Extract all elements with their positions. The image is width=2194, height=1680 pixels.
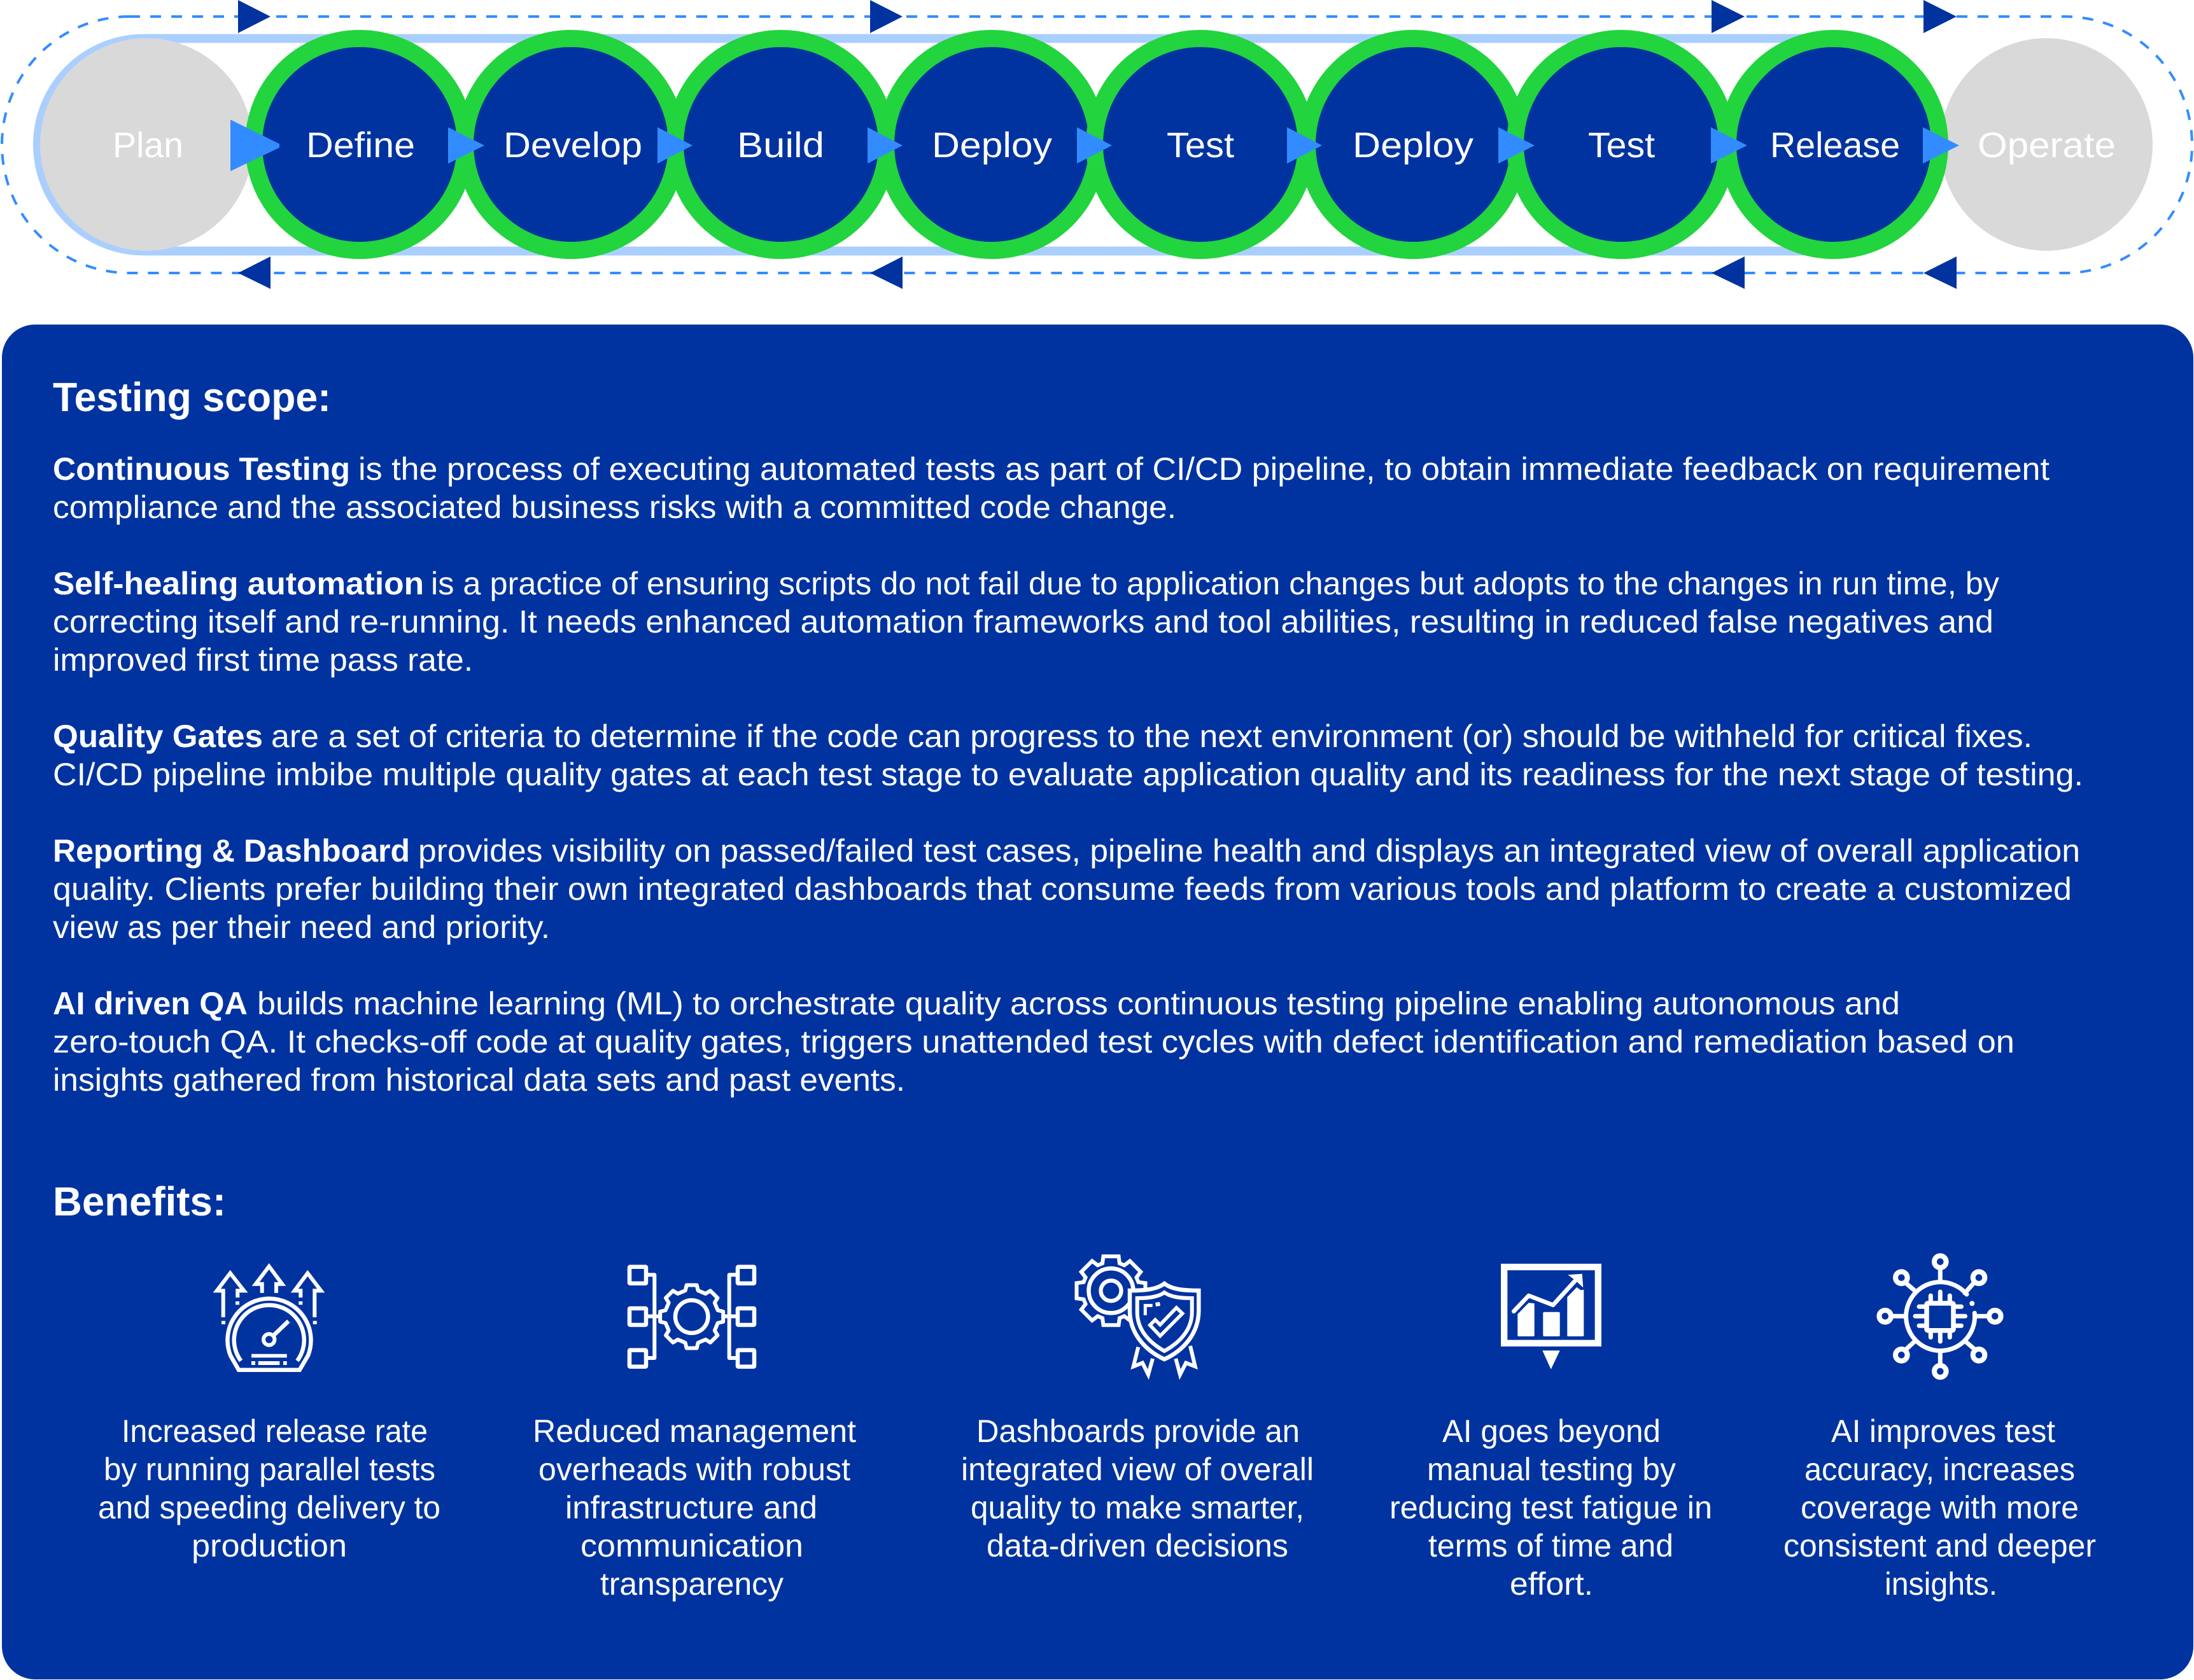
text block: benefit 5: insights. xyxy=(1885,1566,1997,1602)
text block: benefit 4: AI goes beyond xyxy=(1442,1413,1661,1449)
text block: AI driven QA: AI driven QA xyxy=(53,986,248,1021)
text block: benefit 3 xyxy=(961,1413,1314,1564)
stage: Build: Build xyxy=(737,125,824,165)
stage: Plan xyxy=(40,38,253,251)
stage: Deploy xyxy=(886,38,1097,251)
stage: Test second: Test xyxy=(1588,125,1655,165)
stage: Test: Test xyxy=(1167,125,1234,165)
text block: AI driven QA xyxy=(53,986,2015,1098)
text block: Quality Gates xyxy=(53,718,2083,792)
text block: Continuous Testing xyxy=(53,451,2050,525)
text block: benefit 4: effort. xyxy=(1510,1566,1593,1602)
stage: Test second xyxy=(1515,38,1727,251)
arrows: bottom loop direction xyxy=(238,256,1957,289)
text block: AI driven QA: insights gathered from historical data sets and past events. xyxy=(53,1062,905,1098)
text block: benefit 5: accuracy, increases xyxy=(1804,1452,2075,1487)
stage: Release: Release xyxy=(1770,125,1900,165)
text block: AI driven QA: builds machine learning (ML) to orchestrate quality across continuous testing pipeline enabling autonomous and xyxy=(257,986,1900,1021)
dashed feedback loop xyxy=(2,17,2192,273)
text block: Continuous Testing: is the process of executing automated tests as part of CI/CD pipeline, to obtain immediate feedback on requirement xyxy=(358,451,2050,487)
text block: Self-healing automation: correcting itself and re-running. It needs enhanced automation frameworks and tool abilities, resulting in reduced false negatives and xyxy=(53,604,1994,640)
text block: benefit 2 xyxy=(533,1413,856,1602)
text block: Quality Gates: CI/CD pipeline imbibe multiple quality gates at each test stage to evaluate application quality and its readiness for the next stage of testing. xyxy=(53,757,2083,792)
stage: Operate: Operate xyxy=(1978,125,2116,165)
text block: benefit 2: infrastructure and xyxy=(565,1490,817,1525)
text block: benefit 3: integrated view of overall xyxy=(961,1452,1314,1487)
stage: Release xyxy=(1727,38,1940,251)
stage: Build xyxy=(675,38,887,251)
text block: Reporting and Dashboard: quality. Clients prefer building their own integrated dashboards that consume feeds from various tools and platform to create a customized xyxy=(53,871,2072,907)
stage: Operate xyxy=(1940,38,2153,251)
stage: Deploy second: Deploy xyxy=(1353,125,1473,165)
text block: benefit 2: Reduced management xyxy=(533,1413,856,1449)
text block: Quality Gates: are a set of criteria to determine if the code can progress to the next environment (or) should be withheld for critical fixes. xyxy=(271,718,2032,754)
text block: benefit 1: and speeding delivery to xyxy=(98,1490,440,1525)
text block: AI driven QA: zero-touch QA. It checks-off code at quality gates, triggers unattended test cycles with defect identification and remediation based on xyxy=(53,1024,2015,1060)
text block: Self-healing automation: Self-healing automation xyxy=(53,566,424,601)
pipeline diagram xyxy=(2,0,2192,289)
text block: benefit 1: production xyxy=(192,1528,347,1564)
text block: Self-healing automation xyxy=(53,566,1999,678)
icon: gear and shield xyxy=(1077,1256,1199,1375)
stage: Develop xyxy=(465,38,677,251)
icon: gear network xyxy=(629,1267,754,1367)
text block: Reporting and Dashboard: view as per their need and priority. xyxy=(53,909,550,945)
stage: Deploy second xyxy=(1307,38,1519,251)
arrows: stage connectors xyxy=(230,120,1959,171)
icon: chart board xyxy=(1504,1267,1598,1369)
stage: Deploy: Deploy xyxy=(932,125,1052,165)
light blue track xyxy=(38,38,1833,251)
stage: Test xyxy=(1095,38,1306,251)
heading: Benefits: Benefits: xyxy=(53,1179,226,1224)
text block: Reporting and Dashboard xyxy=(53,833,2080,945)
text block: Self-healing automation: improved first time pass rate. xyxy=(53,642,473,678)
arrows: top loop direction xyxy=(238,0,1957,33)
text block: benefit 2: overheads with robust xyxy=(538,1452,850,1487)
text block: Quality Gates: Quality Gates xyxy=(53,718,263,754)
text block: benefit 1 xyxy=(98,1413,440,1564)
text block: benefit 4: manual testing by xyxy=(1427,1452,1676,1487)
text block: Continuous Testing: Continuous Testing xyxy=(53,451,350,487)
icon: speedometer with arrows xyxy=(217,1266,321,1370)
text block: Reporting and Dashboard: Reporting & Dashboard xyxy=(53,833,410,869)
text block: Continuous Testing: compliance and the associated business risks with a committed code change. xyxy=(53,489,1176,525)
stage: Develop: Develop xyxy=(503,125,642,165)
text block: benefit 3: Dashboards provide an xyxy=(976,1413,1300,1449)
text block: Self-healing automation: is a practice of ensuring scripts do not fail due to application changes but adopts to the changes in run time, by xyxy=(431,566,1999,601)
text block: benefit 2: communication xyxy=(580,1528,803,1564)
text block: Reporting and Dashboard: provides visibility on passed/failed test cases, pipeline health and displays an integrated view of overall application xyxy=(418,833,2080,869)
text block: benefit 4 xyxy=(1389,1413,1712,1602)
stage: Plan: Plan xyxy=(113,125,183,165)
stage: Define: Define xyxy=(306,125,415,165)
text block: benefit 5: consistent and deeper xyxy=(1783,1528,2096,1564)
text block: benefit 3: quality to make smarter, xyxy=(971,1490,1304,1525)
text block: benefit 4: terms of time and xyxy=(1428,1528,1673,1564)
icon: AI chip xyxy=(1879,1256,2001,1377)
text block: benefit 1: Increased release rate xyxy=(122,1413,428,1449)
text block: benefit 5: AI improves test xyxy=(1831,1413,2055,1449)
heading: Testing scope: Testing scope: xyxy=(53,374,331,420)
stage: Define xyxy=(253,38,466,251)
text block: benefit 1: by running parallel tests xyxy=(104,1452,435,1487)
text block: benefit 5: coverage with more xyxy=(1801,1490,2079,1525)
text block: benefit 3: data-driven decisions xyxy=(987,1528,1288,1564)
text block: benefit 2: transparency xyxy=(600,1566,784,1602)
text block: benefit 5 xyxy=(1783,1413,2096,1602)
text block: benefit 4: reducing test fatigue in xyxy=(1389,1490,1712,1525)
